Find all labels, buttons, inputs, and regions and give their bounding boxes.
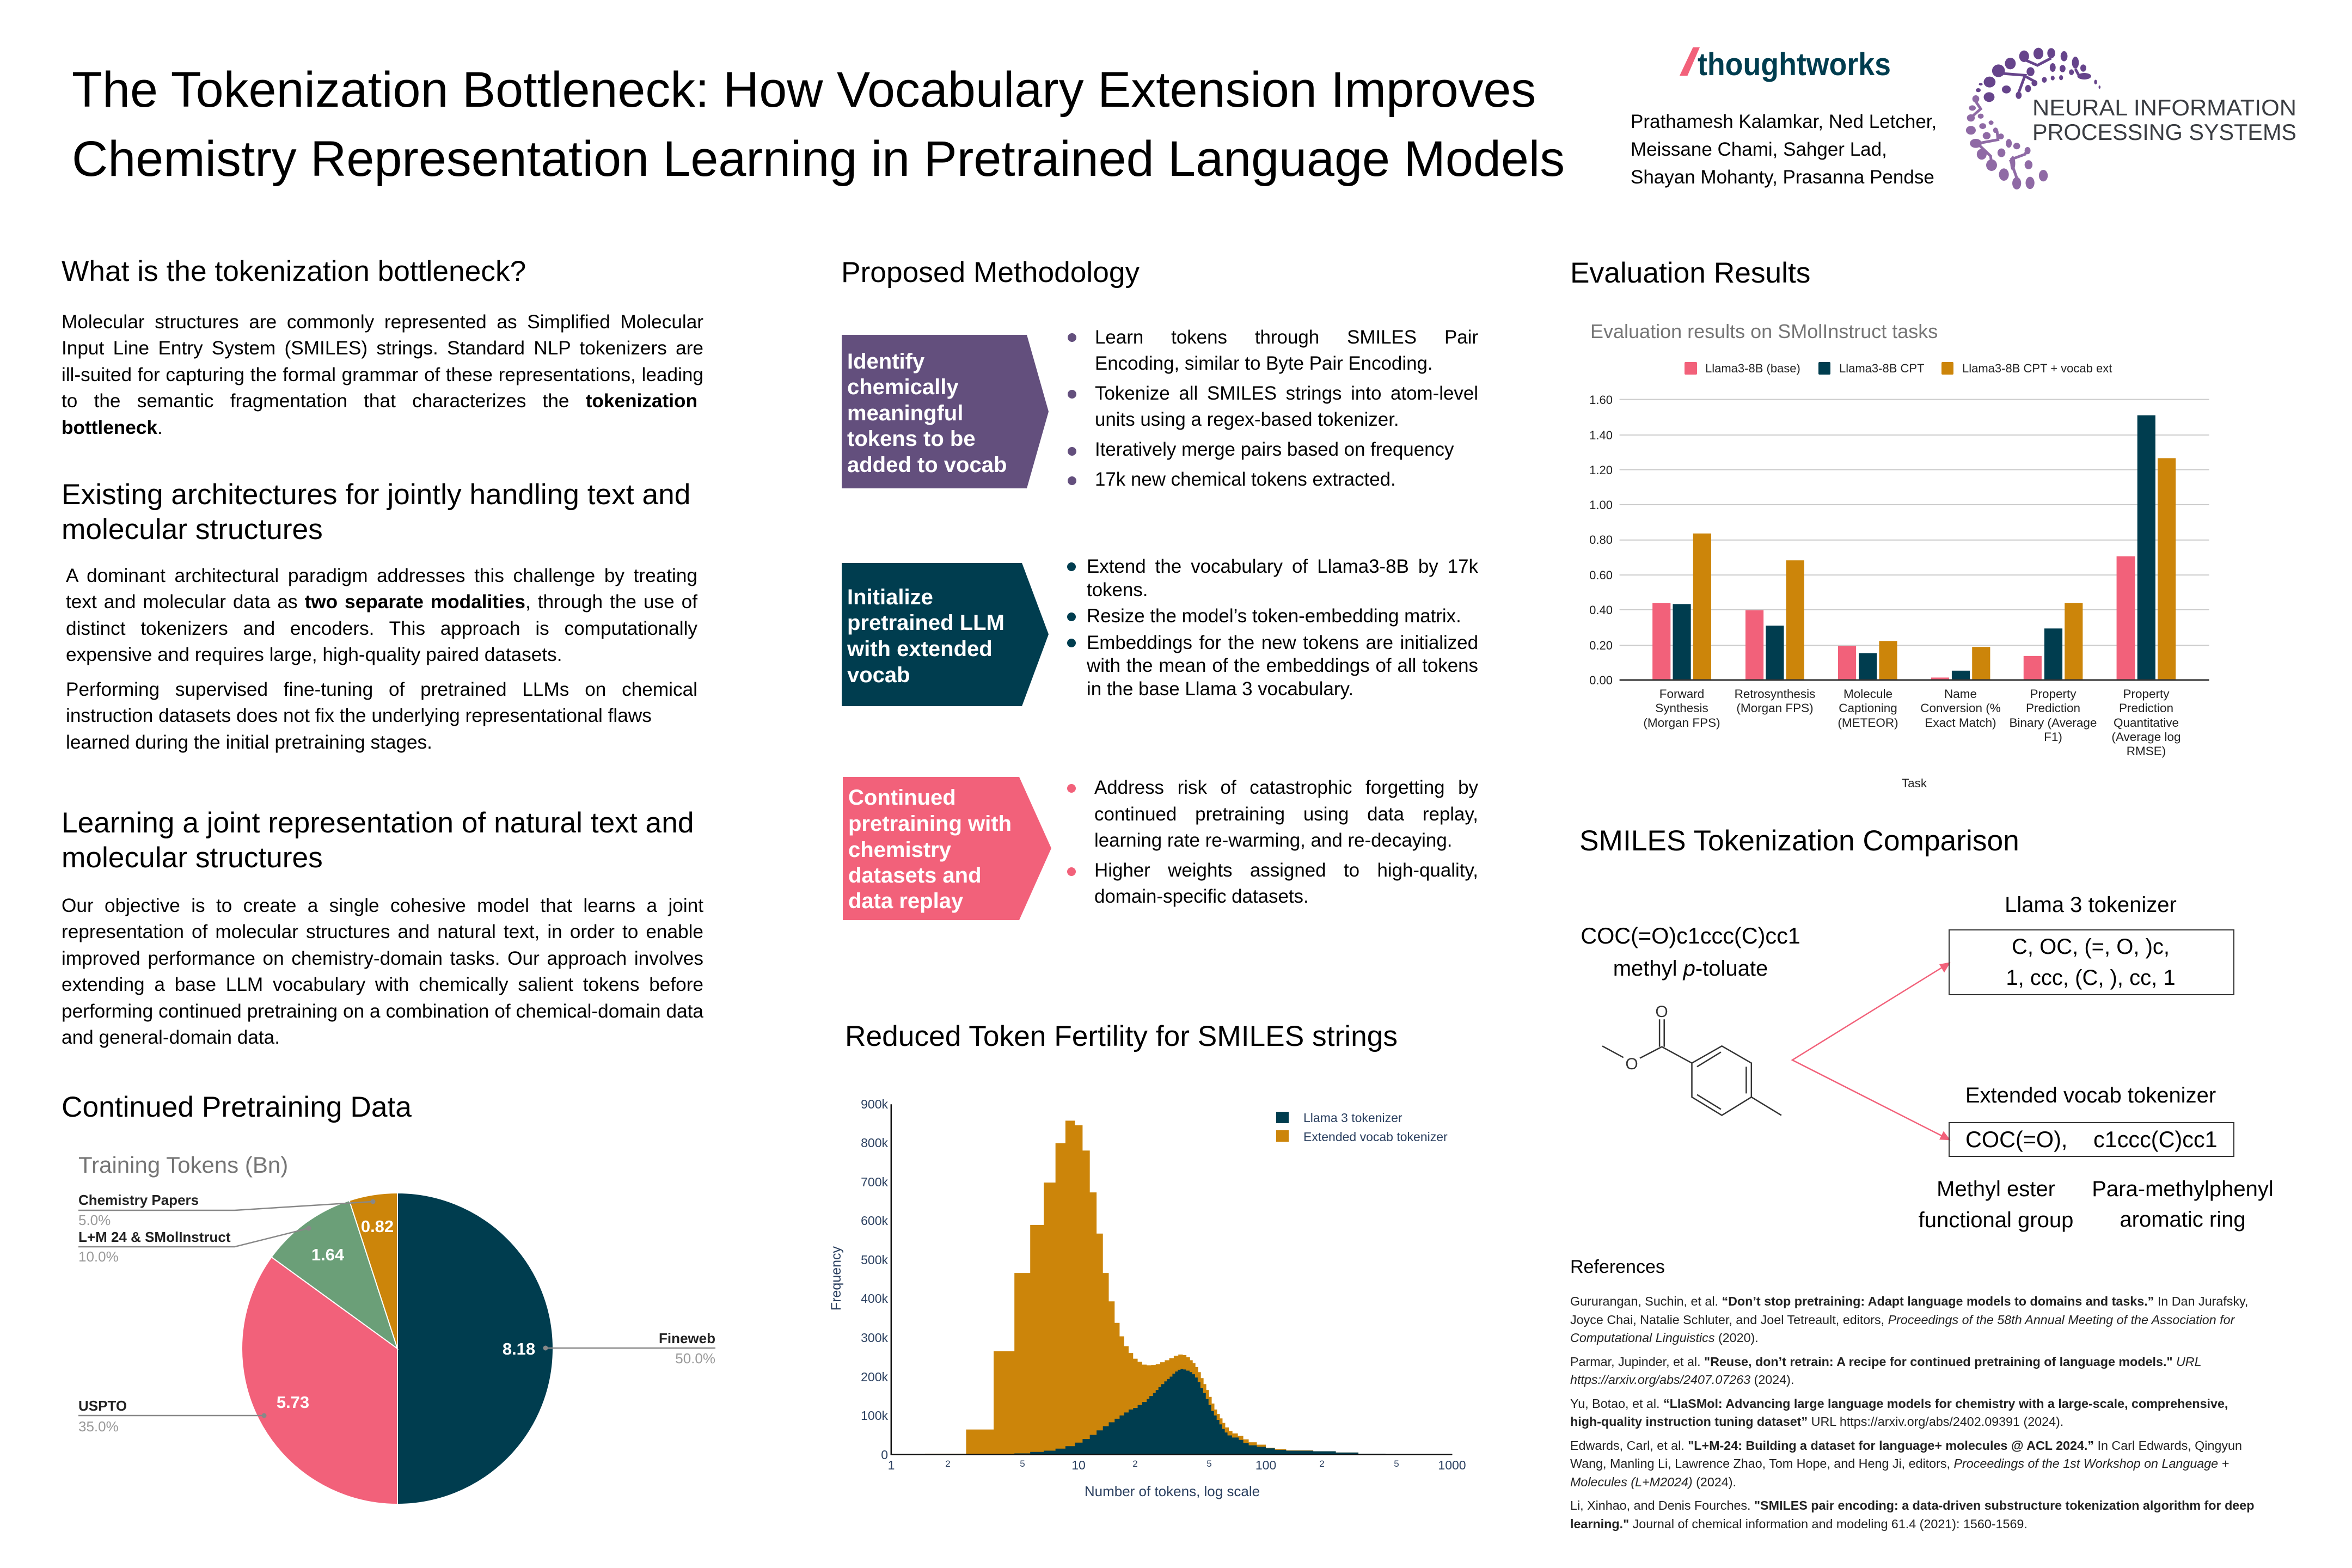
text block: existing architectures: expensive and requires large, high-quality paired datasets. [66, 644, 562, 665]
pie category labels: Fineweb [659, 1330, 715, 1346]
reference list: Molecules (L+M2024) (2024). [1570, 1474, 1736, 1489]
histogram x axis labels: 2 [1132, 1459, 1138, 1469]
heading: proposed methodology: Proposed Methodology [841, 256, 1140, 289]
bar chart legend: Llama3-8B (base) [1705, 362, 1800, 375]
heading: existing architectures: Existing architectures for jointly handling text and [62, 479, 690, 511]
bullets: initialize LLM: with the mean of the embeddings of all tokens [1087, 655, 1478, 676]
histogram: token fertility [829, 1097, 1466, 1499]
reference list: Li, Xinhao, and Denis Fourches. "SMILES pair encoding: a data-driven substructure tokenization algorithm for deep [1570, 1498, 2254, 1512]
text block: objective: and general-domain data. [62, 1027, 280, 1048]
bar chart x axis labels: RMSE) [2127, 744, 2166, 758]
bullet dots: identify tokens [1068, 333, 1076, 485]
logo: neural information processing systems: PROCESSING SYSTEMS [2032, 119, 2296, 145]
tokenizer: extended vocab: COC(=O), [1965, 1127, 2067, 1152]
histogram y axis labels: 100k [861, 1408, 888, 1423]
bullets: continued pretraining: Address risk of catastrophic forgetting by [1094, 777, 1478, 798]
heading: reduced token fertility: Reduced Token Fertility for SMILES strings [845, 1020, 1398, 1052]
bullets: continued pretraining [1094, 777, 1478, 907]
pie slice: chemistry papers [350, 1193, 397, 1349]
reference list: Gururangan, Suchin, et al. “Don’t stop pretraining: Adapt language models to domains and tasks.” In Dan Jurafsky, [1570, 1294, 2248, 1308]
histogram y axis labels: 400k [861, 1291, 888, 1306]
arrow: initialize llm: pretrained LLM [847, 611, 1004, 635]
heading: existing architectures: molecular structures [62, 513, 323, 546]
molecule: methyl p-toluate: O [1655, 1003, 1668, 1021]
logo: neural information processing systems: NEURAL INFORMATION [2032, 95, 2296, 120]
histogram x axis title: Number of tokens, log scale [1085, 1483, 1260, 1499]
reference list: Joyce Chai, Natalie Schluter, and Joel Tetreault, editors, Proceedings of the 58th Annual Meeting of the Association for [1570, 1312, 2234, 1326]
text block: supervised fine-tuning: Performing supervised fine-tuning of pretrained LLMs on chemical [66, 679, 697, 700]
text block: supervised fine-tuning [66, 679, 697, 753]
histogram x axis labels: 5 [1206, 1459, 1212, 1469]
text block: existing architectures [66, 565, 698, 665]
histogram legend [1276, 1111, 1448, 1144]
bullets: identify tokens [1095, 327, 1478, 490]
arrow: continued pretraining: datasets and [848, 863, 982, 887]
pie leader lines [78, 1202, 715, 1416]
token annotations [1919, 1177, 2274, 1232]
bar chart legend: Llama3-8B CPT [1839, 362, 1925, 375]
arrow: initialize llm: with extended [847, 637, 993, 661]
molecule: methyl p-toluate: O [1625, 1055, 1638, 1073]
arrow: initialize llm [842, 563, 1049, 706]
bar chart y axis labels: 0.20 [1589, 639, 1613, 652]
pie percent labels: 10.0% [78, 1248, 119, 1265]
bullets: continued pretraining: continued pretraining using data replay, [1094, 804, 1478, 825]
title: Chemistry Representation Learning in Pretrained Language Models [72, 131, 1565, 187]
pie slice: l+m 24 and smolinstruct [272, 1200, 397, 1349]
bar chart x axis labels: Quantitative [2114, 716, 2179, 730]
text block: objective: improved performance on chemistry-domain tasks. Our approach involves [62, 948, 703, 969]
bar chart x axis labels: Property [2123, 687, 2170, 701]
authors [1631, 111, 1937, 188]
tokenizer: extended vocab [1949, 1083, 2234, 1156]
arrow: continued pretraining: Continued [848, 786, 956, 810]
bar chart y axis labels [1589, 393, 1613, 687]
smiles string and name: COC(=O)c1ccc(C)cc1 [1581, 923, 1800, 948]
bar chart y axis labels: 0.60 [1589, 568, 1613, 582]
pie slice: uspto [242, 1257, 397, 1504]
bar chart x axis labels: Name [1944, 687, 1977, 701]
bar chart x axis title: Task [1902, 776, 1927, 790]
bars: llama3-8b cpt [1673, 415, 2155, 680]
tokenizer: extended vocab: c1ccc(C)cc1 [2093, 1127, 2218, 1152]
arrow: identify tokens [842, 335, 1049, 488]
bar chart y axis labels: 0.00 [1589, 673, 1613, 687]
bar chart y axis labels: 1.60 [1589, 393, 1613, 407]
arrow: identify tokens: Identify [847, 350, 925, 373]
histogram y axis labels: 700k [861, 1175, 888, 1189]
bar chart y axis labels: 0.40 [1589, 603, 1613, 617]
token annotations: Para-methylphenyl [2092, 1177, 2274, 1201]
histogram y axis labels: 200k [861, 1370, 888, 1384]
arrow: identify tokens: added to vocab [847, 453, 1007, 477]
bullet dots: initialize llm [1067, 562, 1076, 647]
arrow: initialize llm: Initialize [847, 585, 933, 609]
histogram x axis labels: 5 [1020, 1459, 1025, 1469]
heading: evaluation results: Evaluation Results [1570, 257, 1810, 289]
bullets: continued pretraining: domain-specific datasets. [1094, 886, 1309, 907]
pie value labels [277, 1217, 535, 1412]
title: The Tokenization Bottleneck: How Vocabulary Extension Improves [72, 62, 1536, 118]
text block: bottleneck description: bottleneck. [62, 417, 163, 438]
heading: learning a joint representation [62, 807, 694, 874]
histogram y axis labels: 0 [881, 1448, 888, 1462]
bar chart x axis labels: Synthesis [1655, 701, 1708, 715]
reference list: Edwards, Carl, et al. "L+M-24: Building a dataset for language+ molecules @ ACL 2024.” In Carl Edwards, Qingyun [1570, 1438, 2242, 1453]
histogram bars: llama 3 tokenizer [966, 1369, 1386, 1455]
tokenizer: llama 3 [1949, 893, 2234, 995]
logo: neural information processing systems [1966, 48, 2296, 189]
pie chart: training tokens [78, 1152, 715, 1504]
histogram bars: extended vocab tokenizer [925, 1120, 1386, 1455]
bar chart x axis labels: Forward [1659, 687, 1704, 701]
bar chart y axis labels: 0.80 [1589, 533, 1613, 547]
reference list: Parmar, Jupinder, et al. "Reuse, don’t retrain: A recipe for continued pretraining of language models." URL [1570, 1355, 2202, 1369]
arrow: continued pretraining: data replay [848, 889, 964, 913]
authors: Shayan Mohanty, Prasanna Pendse [1631, 167, 1934, 188]
tokenizer: llama 3: C, OC, (=, O, )c, [2012, 935, 2170, 959]
token annotations: Methyl ester [1937, 1177, 2055, 1201]
bar chart x axis labels: (Average log [2111, 730, 2181, 744]
bar chart x axis labels: Property [2030, 687, 2077, 701]
bullets: initialize LLM: in the base Llama 3 vocabulary. [1087, 678, 1353, 699]
bullet dots: continued pretraining [1067, 784, 1076, 876]
histogram legend: Extended vocab tokenizer [1303, 1130, 1448, 1144]
bullets: identify tokens: 17k new chemical tokens extracted. [1095, 469, 1396, 490]
bar chart legend [1685, 362, 2112, 375]
pie value labels: 5.73 [277, 1393, 309, 1412]
bar chart title: Evaluation results on SMolInstruct tasks [1590, 320, 1938, 342]
bar chart x axis labels: Molecule [1843, 687, 1892, 701]
pie category labels: Chemistry Papers [78, 1192, 199, 1208]
histogram x axis labels: 10 [1071, 1458, 1086, 1472]
arrow: continued pretraining: chemistry [848, 838, 952, 862]
histogram legend: Llama 3 tokenizer [1303, 1111, 1402, 1125]
smiles string and name: methyl p-toluate [1613, 957, 1768, 981]
histogram x axis labels: 1 [888, 1458, 895, 1472]
histogram y axis title: Frequency [829, 1246, 844, 1310]
bar chart x axis labels: (Morgan FPS) [1643, 716, 1720, 730]
text block: bottleneck description [62, 311, 703, 438]
arrow: identify tokens: tokens to be [847, 427, 976, 451]
text block: existing architectures: distinct tokenizers and encoders. This approach is computationally [66, 618, 697, 639]
bar chart x axis labels: (METEOR) [1837, 716, 1898, 730]
arrow: continued pretraining: pretraining with [848, 812, 1012, 836]
bar chart x axis labels: F1) [2044, 730, 2062, 744]
pie category labels: L+M 24 & SMolInstruct [78, 1229, 231, 1245]
text block: objective: performing continued pretraining on a combination of chemical-domain data [62, 1001, 703, 1022]
pie category labels: USPTO [78, 1398, 127, 1414]
token annotations: aromatic ring [2120, 1208, 2246, 1232]
bars: llama3-8b base [1652, 556, 2135, 680]
histogram y axis labels: 600k [861, 1214, 888, 1228]
heading: smiles tokenization comparison: SMILES Tokenization Comparison [1579, 825, 2019, 857]
pie percent labels: 5.0% [78, 1212, 111, 1228]
bar chart x axis labels: Prediction [2119, 701, 2173, 715]
text block: objective [62, 895, 703, 1048]
histogram y axis labels: 300k [861, 1331, 888, 1345]
bar chart legend: Llama3-8B CPT + vocab ext [1962, 362, 2112, 375]
heading: references: References [1570, 1257, 1665, 1277]
bar chart x axis labels: Prediction [2026, 701, 2080, 715]
reference list: Computational Linguistics (2020). [1570, 1331, 1759, 1345]
pie value labels: 1.64 [311, 1245, 345, 1264]
histogram x axis labels [888, 1458, 1466, 1472]
text block: bottleneck description: to the semantic fragmentation that characterizes the tokenization [62, 390, 697, 412]
text block: objective: extending a base LLM vocabulary with chemically salient tokens before [62, 974, 703, 995]
bullets: identify tokens: Learn tokens through SMILES Pair [1095, 327, 1478, 348]
bullets: initialize LLM: tokens. [1087, 579, 1148, 600]
tokenizer: llama 3: Llama 3 tokenizer [2005, 893, 2177, 917]
bar chart x axis labels [1643, 687, 2181, 758]
pie slice: fineweb [397, 1193, 553, 1504]
arrows: tokenizer split [1792, 963, 1949, 1140]
bullets: initialize LLM: Resize the model’s token-embedding matrix. [1087, 605, 1461, 627]
bullets: identify tokens: Tokenize all SMILES strings into atom-level [1095, 383, 1478, 404]
bar chart: evaluation results [1589, 320, 2209, 790]
reference list: Wang, Manling Li, Lawrence Zhao, Tom Hope, and Heng Ji, editors, Proceedings of the 1st Workshop on Language + [1570, 1456, 2229, 1471]
arrow: identify tokens: chemically [847, 375, 959, 399]
heading: existing architectures [62, 479, 690, 546]
bars: llama3-8b cpt plus vocab ext [1693, 458, 2176, 680]
bar chart x axis labels: Exact Match) [1925, 716, 1996, 730]
arrow: continued pretraining [843, 777, 1051, 920]
tokenizer: extended vocab: Extended vocab tokenizer [1965, 1083, 2216, 1107]
heading: learning a joint representation: Learning a joint representation of natural text and [62, 807, 694, 839]
bar chart y axis labels: 1.40 [1589, 428, 1613, 442]
pie chart title: Training Tokens (Bn) [78, 1152, 288, 1178]
reference list: learning." Journal of chemical information and modeling 61.4 (2021): 1560-1569. [1570, 1517, 2028, 1531]
bar chart x axis labels: Binary (Average [2010, 716, 2097, 730]
heading: continued pretraining data: Continued Pretraining Data [62, 1091, 412, 1123]
pie percent labels: 50.0% [675, 1350, 715, 1367]
pie percent labels: 35.0% [78, 1418, 119, 1435]
token annotations: functional group [1919, 1208, 2073, 1232]
arrow: initialize llm: vocab [847, 663, 910, 687]
histogram y axis labels: 500k [861, 1253, 888, 1267]
histogram x axis labels: 2 [1319, 1459, 1325, 1469]
bullets: initialize LLM: Embeddings for the new tokens are initialized [1087, 632, 1478, 653]
reference list [1570, 1294, 2254, 1531]
bullets: identify tokens: Encoding, similar to Byte Pair Encoding. [1095, 353, 1433, 374]
bullets: continued pretraining: Higher weights assigned to high-quality, [1094, 860, 1478, 881]
molecule: methyl p-toluate [1602, 1003, 1781, 1116]
histogram y axis labels [861, 1097, 888, 1462]
pie value labels: 0.82 [361, 1217, 394, 1236]
text block: objective: Our objective is to create a single cohesive model that learns a joint [62, 895, 703, 916]
text block: bottleneck description: Input Line Entry System (SMILES) strings. Standard NLP tokenizers are [62, 338, 703, 359]
text block: objective: representation of molecular structures and natural text, in order to enable [62, 921, 703, 942]
authors: Prathamesh Kalamkar, Ned Letcher, [1631, 111, 1937, 132]
reference list: high-quality instruction tuning dataset” URL https://arxiv.org/abs/2402.09391 (2024). [1570, 1414, 2063, 1429]
bar chart y axis labels: 1.20 [1589, 463, 1613, 477]
logo: thoughtworks: thoughtworks [1698, 47, 1891, 82]
text block: bottleneck description: Molecular structures are commonly represented as Simplified Molecular [62, 311, 703, 333]
histogram y axis labels: 900k [861, 1097, 888, 1111]
histogram y axis labels: 800k [861, 1136, 888, 1150]
title [72, 62, 1565, 187]
pie percent labels [78, 1212, 715, 1435]
text block: existing architectures: A dominant architectural paradigm addresses this challenge by treating [66, 565, 697, 586]
pie category labels [78, 1192, 715, 1414]
histogram x axis labels: 5 [1394, 1459, 1399, 1469]
bullets: initialize LLM [1087, 556, 1478, 699]
arrow: identify tokens: meaningful [847, 401, 963, 425]
bar chart x axis labels: Retrosynthesis [1735, 687, 1815, 701]
histogram x axis labels: 1000 [1438, 1458, 1466, 1472]
heading: learning a joint representation: molecular structures [62, 842, 323, 874]
text block: existing architectures: text and molecular data as two separate modalities, through the use of [66, 591, 697, 612]
bar chart x axis labels: Conversion (% [1920, 701, 2001, 715]
text block: supervised fine-tuning: instruction datasets does not fix the underlying representational flaws [66, 705, 652, 726]
bullets: identify tokens: Iteratively merge pairs based on frequency [1095, 439, 1454, 460]
text block: bottleneck description: ill-suited for capturing the formal grammar of these representations, leading [62, 364, 703, 385]
authors: Meissane Chami, Sahger Lad, [1631, 139, 1887, 160]
bullets: identify tokens: units using a regex-based tokenizer. [1095, 409, 1399, 430]
text block: supervised fine-tuning: learned during the initial pretraining stages. [66, 732, 432, 753]
histogram x axis labels: 2 [945, 1459, 951, 1469]
smiles string and name [1581, 923, 1800, 981]
pie value labels: 8.18 [503, 1339, 535, 1358]
bar chart x axis labels: Captioning [1839, 701, 1897, 715]
bullets: initialize LLM: Extend the vocabulary of Llama3-8B by 17k [1087, 556, 1478, 577]
bar chart x axis labels: (Morgan FPS) [1736, 701, 1814, 715]
histogram x axis labels: 100 [1255, 1458, 1276, 1472]
reference list: https://arxiv.org/abs/2407.07263 (2024). [1570, 1373, 1794, 1387]
tokenizer: llama 3: 1, ccc, (C, ), cc, 1 [2006, 966, 2176, 990]
reference list: Yu, Botao, et al. “LlaSMol: Advancing large language models for chemistry with a large-scale, comprehensive, [1570, 1396, 2228, 1410]
bar chart y axis labels: 1.00 [1589, 498, 1613, 512]
heading: what is the bottleneck: What is the tokenization bottleneck? [62, 255, 526, 287]
bullets: continued pretraining: learning rate re-warming, and re-decaying. [1094, 830, 1452, 851]
